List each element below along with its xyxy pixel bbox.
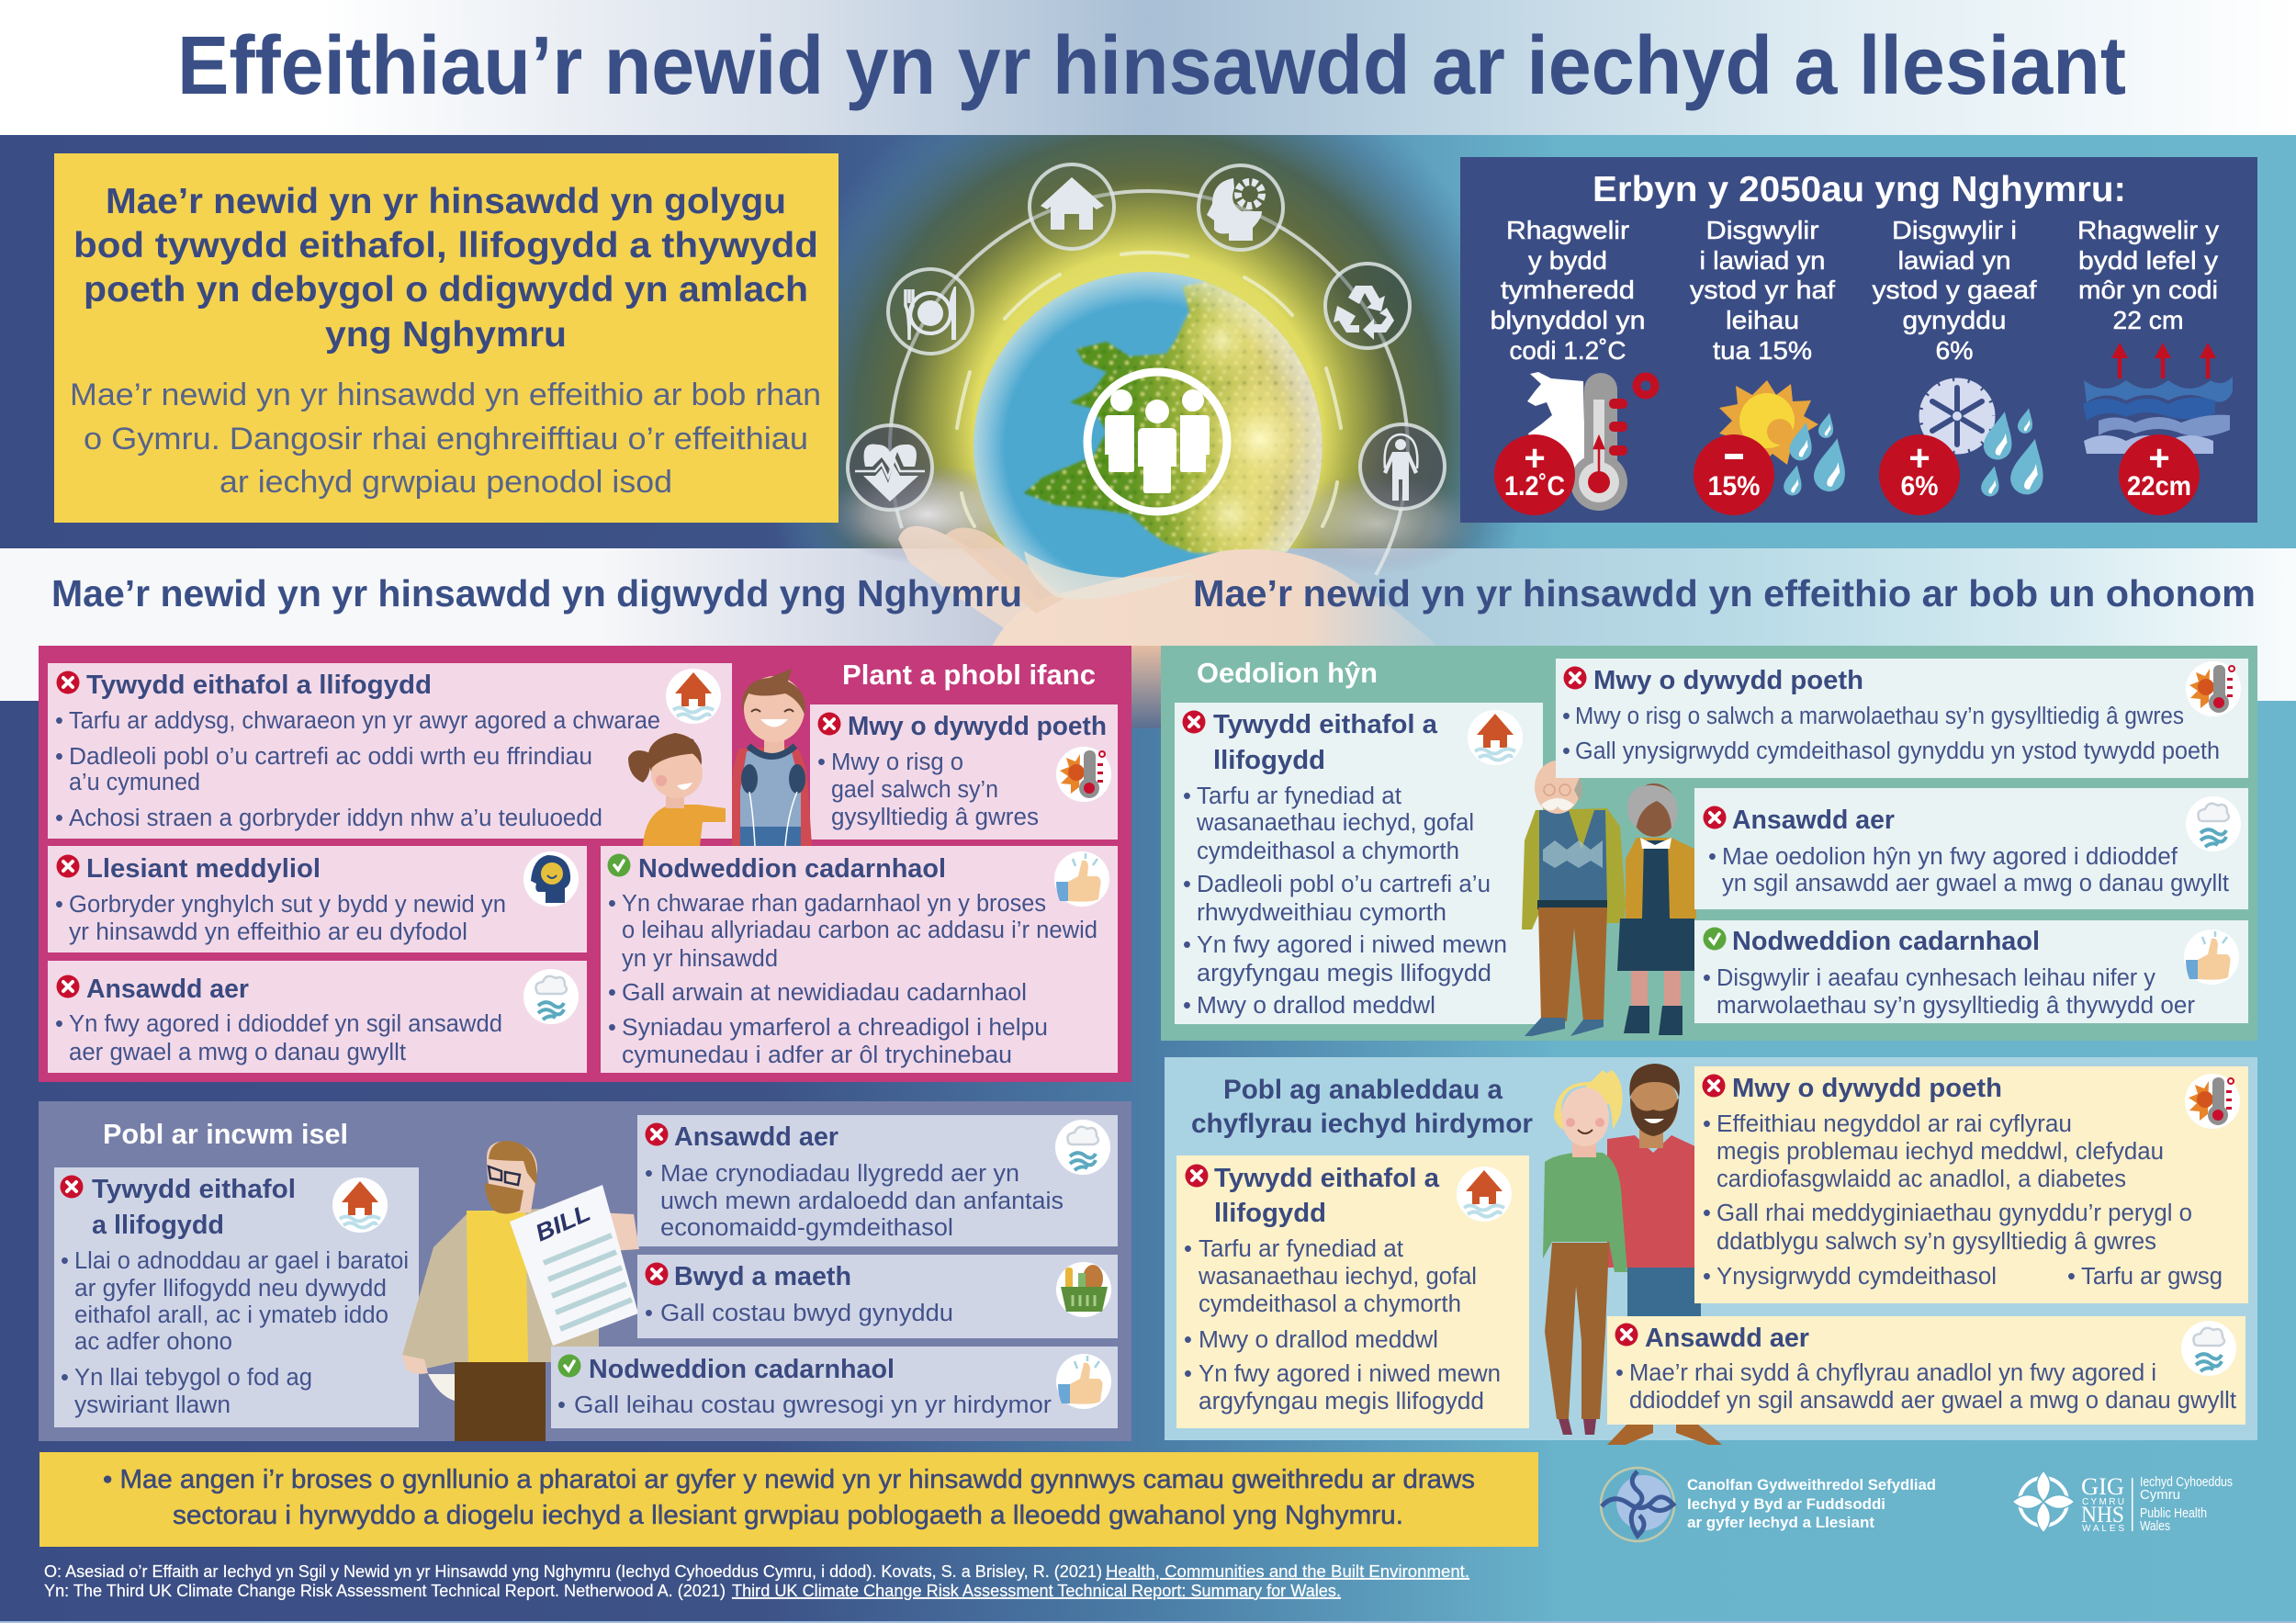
- badge: +1.2°C: +: [1524, 438, 1546, 479]
- bullets: •: [645, 1301, 653, 1326]
- box heading: Nodweddion cadarnhaol: [1732, 927, 2040, 956]
- icon: cloud and wind: [2186, 796, 2241, 851]
- panel: older adults: [1161, 646, 2257, 1041]
- bullets: cymunedau i adfer ar ôl trychinebau: [622, 1043, 1012, 1068]
- badge: [1703, 806, 1727, 828]
- icon: cloud and wind: [523, 969, 579, 1024]
- bullets: •: [1703, 1200, 1711, 1226]
- bullets: •: [55, 892, 63, 918]
- column: temperature text: tymheredd: [1501, 276, 1635, 304]
- title: Effeithiau’r newid yn yr hinsawdd ar iechyd a llesiant: [177, 20, 2126, 112]
- badge: [1183, 711, 1205, 733]
- box: hotter weather: [1694, 1066, 2248, 1303]
- icon: central people ring: [1087, 372, 1227, 512]
- bullets: a’u cymuned: [69, 770, 200, 795]
- badge: [61, 1176, 83, 1198]
- panel: people on low incomes: [39, 1101, 1131, 1441]
- bullets: [817, 750, 1039, 830]
- icon: rising sea level: [2083, 343, 2233, 454]
- icon: flood: [1457, 1167, 1512, 1222]
- bullets: Mwy o risg o: [831, 750, 963, 775]
- badge: [57, 671, 79, 694]
- bullets: yswiriant llawn: [74, 1392, 231, 1418]
- illustration: woman and man: [1543, 1064, 1722, 1445]
- icon: heat: [2186, 661, 2241, 716]
- centre name: ar gyfer Iechyd a Llesiant: [1687, 1514, 1874, 1531]
- badge: -15%: 15%: [1708, 471, 1760, 502]
- bullets: Yn fwy agored i niwed mewn: [1197, 932, 1507, 958]
- column: temperature text: codi 1.2˚C: [1510, 336, 1626, 365]
- box heading: Tywydd eithafol a: [1213, 710, 1438, 739]
- icon: house: [1030, 164, 1114, 249]
- column: summer rainfall text: i lawiad yn: [1699, 246, 1826, 275]
- column: sea level text: bydd lefel y: [2078, 246, 2218, 275]
- icon: food basket: [1056, 1262, 1111, 1317]
- source references: Third UK Climate Change Risk Assessment Technical Report: Summary for Wales.: [732, 1582, 1341, 1600]
- callout: yellow conclusion: [39, 1452, 1538, 1547]
- box: extreme weather and flooding: [48, 663, 732, 839]
- bullets: cymdeithasol a chymorth: [1197, 839, 1459, 864]
- logo: Public Health Wales: [2012, 1471, 2233, 1534]
- illustration: man holding a bill: [402, 1141, 639, 1441]
- box: extreme weather and flooding: [1176, 1155, 1529, 1428]
- icon: heat: [2185, 1074, 2240, 1129]
- column: winter rainfall text: ystod y gaeaf: [1872, 276, 2037, 304]
- badge: [1703, 928, 1727, 950]
- box: air quality: [1694, 788, 2248, 909]
- box heading: Mwy o dywydd poeth: [848, 712, 1107, 741]
- bullets: •: [1708, 844, 1716, 870]
- bullets: Mwy o drallod meddwl: [1199, 1327, 1438, 1353]
- column: winter rainfall text: Disgwylir i: [1892, 216, 2017, 244]
- bullets: •: [61, 1365, 69, 1391]
- panel title: [1191, 1075, 1533, 1139]
- badge: -15%: [1694, 434, 1774, 515]
- bullets: Yn fwy agored i ddioddef yn sgil ansawdd: [69, 1011, 502, 1037]
- bullets: •: [55, 744, 63, 770]
- bullets: •: [1703, 1111, 1711, 1137]
- icon: thumbs up: [1054, 851, 1109, 907]
- badge: +22cm: 22cm: [2127, 471, 2191, 502]
- bullets: •: [608, 891, 616, 917]
- logo: Public Health Wales: Wales: [2140, 1518, 2170, 1534]
- box: air quality: [48, 961, 587, 1073]
- bullets: •: [1703, 965, 1711, 991]
- heading: left section: Mae’r newid yn yr hinsawdd yn digwydd yng Nghymru: [51, 572, 1022, 614]
- box heading: llifogydd: [1214, 1199, 1326, 1228]
- badge: [57, 854, 79, 878]
- icon: heat: [1056, 747, 1111, 802]
- bullets: eithafol arall, ac i ymateb iddo: [74, 1302, 388, 1328]
- bullets: •: [55, 1011, 63, 1037]
- badge: [645, 1122, 669, 1146]
- source references: O: Asesiad o’r Effaith ar Iechyd yn Sgil y Newid yn yr Hinsawdd yng Nghymru (Iechyd Cyhoeddus Cymru, i ddod). Kovats, S. a Brisley, R. (2021): [44, 1562, 1102, 1581]
- bullets: Gall ynysigrwydd cymdeithasol gynyddu yn ystod tywydd poeth: [1575, 738, 2220, 764]
- bullets: [61, 1248, 409, 1418]
- box heading: [1214, 1164, 1440, 1228]
- panel title: Pobl ar incwm isel: [103, 1118, 348, 1150]
- box: hotter weather: [810, 704, 1118, 840]
- bullets: •: [55, 806, 63, 831]
- bullets: [55, 708, 660, 831]
- hand fingers and palm: [898, 526, 1438, 728]
- bullets: yn sgil ansawdd aer gwael a mwg o danau gwyllt: [1722, 871, 2229, 896]
- logo: Public Health Wales: Iechyd Cyhoeddus: [2140, 1474, 2233, 1490]
- box heading: Bwyd a maeth: [674, 1262, 851, 1291]
- central glow: [792, 135, 1510, 548]
- bullets: rhwydweithiau cymorth: [1197, 900, 1446, 926]
- box: hotter weather: [1556, 659, 2248, 778]
- bullets: Mae oedolion hŷn yn fwy agored i ddioddef: [1722, 844, 2178, 870]
- bullets: [1703, 1111, 2223, 1290]
- bullets: yn yr hinsawdd: [622, 946, 778, 972]
- bullets: •: [61, 1248, 69, 1274]
- bullets: Gorbryder ynghylch sut y bydd y newid yn: [69, 892, 506, 918]
- panel: yellow intro: [54, 153, 838, 523]
- box heading: llifogydd: [1213, 746, 1325, 775]
- box: air quality: [1607, 1316, 2245, 1425]
- badge: +6%: [1879, 434, 1960, 515]
- box heading: Ansawdd aer: [86, 975, 249, 1004]
- box: positive features: [601, 846, 1118, 1073]
- bullets: [645, 1161, 1064, 1241]
- bullets: •: [608, 980, 616, 1006]
- box: food and nutrition: [637, 1255, 1118, 1338]
- bullets: Tarfu ar fynediad at: [1197, 783, 1401, 809]
- badge: +1.2°C: 1.2˚C: [1504, 471, 1565, 502]
- bullets: megis problemau iechyd meddwl, clefydau: [1716, 1139, 2164, 1165]
- bullets: Dadleoli pobl o’u cartrefi ac oddi wrth eu ffrindiau: [69, 744, 592, 770]
- box heading: Tywydd eithafol a llifogydd: [86, 671, 432, 700]
- column: summer rainfall text: tua 15%: [1713, 336, 1812, 365]
- centre name: [1687, 1476, 1936, 1531]
- callout text: [103, 1465, 1475, 1530]
- bullets: argyfyngau megis llifogydd: [1197, 961, 1491, 986]
- icon: sun and rain: [1719, 380, 1852, 497]
- badge: +1.2°C: [1494, 434, 1575, 515]
- icon: snowflake and rain: [1922, 381, 2051, 498]
- source references: [44, 1562, 1469, 1600]
- centre name: Iechyd y Byd ar Fuddsoddi: [1687, 1495, 1885, 1513]
- bullets: Mwy o risg o salwch a marwolaethau sy’n gysylltiedig â gwres: [1575, 704, 2184, 729]
- box heading: Ansawdd aer: [1645, 1324, 1809, 1353]
- badge: [1615, 1323, 1638, 1347]
- bullets: •: [1183, 872, 1191, 897]
- bullets: [1183, 783, 1507, 1019]
- title band: [0, 0, 2296, 135]
- bullets: •: [1562, 704, 1570, 729]
- panel title: chyflyrau iechyd hirdymor: [1191, 1109, 1533, 1139]
- badge: +22cm: [2119, 434, 2200, 515]
- bullets: uwch mewn ardaloedd dan anfantais: [660, 1189, 1064, 1214]
- bullets: argyfyngau megis llifogydd: [1199, 1389, 1484, 1414]
- column: winter rainfall text: [1872, 216, 2037, 365]
- badge: [645, 1262, 669, 1286]
- bullets: Yn llai tebygol o fod ag: [74, 1365, 312, 1391]
- logo: Public Health Wales: WALES: [2082, 1524, 2124, 1534]
- icon: thumbs up: [1056, 1354, 1111, 1409]
- logo: Public Health Wales: Cymru: [2140, 1487, 2180, 1503]
- column: sea level text: 22 cm: [2112, 306, 2184, 334]
- bullets: •: [817, 750, 826, 775]
- centre name: Canolfan Gydweithredol Sefydliad: [1687, 1476, 1936, 1493]
- box heading: Mwy o dywydd poeth: [1732, 1074, 2002, 1103]
- bullets: •: [557, 1392, 566, 1418]
- bullets: economaidd-gymdeithasol: [660, 1215, 953, 1241]
- bullets: •: [1183, 993, 1191, 1019]
- intro body text: ar iechyd grwpiau penodol isod: [219, 465, 672, 500]
- box: mental wellbeing: [48, 846, 587, 952]
- bullets: [608, 891, 1097, 1068]
- column: temperature text: Rhagwelir: [1506, 216, 1629, 244]
- box heading: [1213, 710, 1438, 775]
- bullets: Gall rhai meddyginiaethau gynyddu’r perygl o: [1716, 1200, 2192, 1226]
- logo: WHO Collaborating Centre: [1601, 1468, 1936, 1541]
- badge: [1703, 1075, 1725, 1097]
- bullets: Disgwylir i aeafau cynhesach leihau nifer y: [1716, 965, 2155, 991]
- box heading: Mwy o dywydd poeth: [1593, 666, 1863, 695]
- bullets: Dadleoli pobl o’u cartrefi a’u: [1197, 872, 1491, 897]
- box heading: Nodweddion cadarnhaol: [638, 854, 946, 884]
- bullets: ddatblygu salwch sy’n gysylltiedig â gwres: [1716, 1229, 2156, 1255]
- bullets: cymdeithasol a chymorth: [1199, 1291, 1461, 1317]
- bullets: Yn fwy agored i niwed mewn: [1199, 1361, 1501, 1387]
- box heading: Tywydd eithafol a: [1214, 1164, 1440, 1193]
- intro heading: poeth yn debygol o ddigwydd yn amlach: [84, 270, 808, 310]
- bullets: Tarfu ar fynediad at: [1199, 1236, 1403, 1262]
- bullets: [1184, 1236, 1501, 1414]
- badge: [1185, 1165, 1209, 1187]
- bullets: •: [645, 1161, 653, 1187]
- intro body text: o Gymru. Dangosir rhai enghreifftiau o’r effeithiau: [84, 422, 808, 456]
- icon: thumbs up: [2184, 930, 2239, 985]
- icon: flood: [1468, 710, 1523, 765]
- bullets: Mae’r rhai sydd â chyflyrau anadlol yn fwy agored i: [1629, 1360, 2156, 1386]
- icon ring arc: [890, 191, 1408, 575]
- bullets: [55, 892, 506, 945]
- bullets: o leihau allyriadau carbon ac addasu i’r newid: [622, 918, 1097, 943]
- icon: Wales and thermometer: [1527, 372, 1655, 511]
- bullets: cardiofasgwlaidd ac anadlol, a diabetes: [1716, 1167, 2126, 1192]
- icon: recycle: [1325, 264, 1410, 348]
- box: positive features: [551, 1347, 1118, 1428]
- globe sphere: [974, 272, 1322, 591]
- bullets: •: [1615, 1360, 1624, 1386]
- icon: head: [523, 851, 579, 907]
- badge: [608, 854, 630, 876]
- bullets: •: [55, 708, 63, 734]
- bullets: gael salwch sy’n: [831, 777, 998, 803]
- column: summer rainfall text: [1690, 216, 1835, 365]
- panel: children and young people: [39, 646, 1131, 1082]
- bullets: Syniadau ymarferol a chreadigol i helpu: [622, 1015, 1048, 1041]
- logo: Public Health Wales: NHS: [2081, 1503, 2124, 1527]
- bullets: [1562, 704, 2220, 764]
- bullets: Ynysigrwydd cymdeithasol: [1716, 1264, 1997, 1290]
- box heading: Tywydd eithafol: [92, 1175, 296, 1204]
- bill: [510, 1185, 638, 1346]
- heading: right section: Mae’r newid yn yr hinsawdd yn effeithio ar bob un ohonom: [1193, 572, 2256, 614]
- icon: cloud and wind: [2181, 1321, 2236, 1376]
- bullets: •: [1703, 1264, 1711, 1290]
- bullets: Gall arwain at newidiadau cadarnhaol: [622, 980, 1027, 1006]
- bullets: [1615, 1360, 2236, 1414]
- bullets: •: [1184, 1236, 1192, 1262]
- bullets: Tarfu ar gwsg: [2081, 1264, 2223, 1290]
- illustration: older couple: [1522, 761, 1696, 1036]
- bullets: marwolaethau sy’n gysylltiedig â thywydd oer: [1716, 993, 2196, 1019]
- bullets: Yn chwarae rhan gadarnhaol yn y broses: [622, 891, 1046, 917]
- bill: BILL: [531, 1199, 594, 1246]
- source references: Yn: The Third UK Climate Change Risk Assessment Technical Report. Netherwood A. (2021): [44, 1582, 726, 1600]
- panel title: Plant a phobl ifanc: [842, 659, 1096, 691]
- bullets: •: [1183, 783, 1191, 809]
- badge: [57, 975, 79, 997]
- box heading: Nodweddion cadarnhaol: [589, 1355, 895, 1384]
- bullets: Gall costau bwyd gynyddu: [660, 1301, 953, 1326]
- column: temperature text: [1490, 216, 1646, 365]
- intro heading: bod tywydd eithafol, llifogydd a thywydd: [73, 226, 818, 265]
- icon: cloud and wind: [1055, 1120, 1110, 1175]
- column: winter rainfall text: lawiad yn: [1897, 246, 2011, 275]
- bullets: Mae crynodiadau llygredd aer yn: [660, 1161, 1019, 1187]
- panel: disabled people and long-term conditions: [1165, 1057, 2257, 1445]
- bullets: •: [608, 1015, 616, 1041]
- box: extreme weather and flooding: [1175, 703, 1543, 1024]
- column: sea level text: môr yn codi: [2078, 276, 2218, 304]
- haze under the icon ring: [827, 464, 1479, 574]
- callout text: • Mae angen i’r broses o gynllunio a pharatoi ar gyfer y newid yn yr hinsawdd gynnwys camau gweithredu ar draws: [103, 1465, 1475, 1494]
- icon: flood: [666, 669, 721, 724]
- projections heading: Erbyn y 2050au yng Nghymru:: [1593, 170, 2126, 209]
- intro heading: yng Nghymru: [325, 315, 567, 355]
- column: temperature text: blynyddol yn: [1490, 306, 1646, 334]
- inner dashes: [957, 253, 1341, 526]
- column: summer rainfall text: ystod yr haf: [1690, 276, 1835, 304]
- box heading: Ansawdd aer: [1732, 806, 1895, 835]
- icon: head with gear: [1199, 165, 1283, 250]
- bullets: Achosi straen a gorbryder iddyn nhw a’u teuluoedd: [69, 806, 602, 831]
- bullets: Llai o adnoddau ar gael i baratoi: [74, 1248, 409, 1274]
- badge: +6%: 6%: [1901, 471, 1938, 502]
- bullets: Mwy o drallod meddwl: [1197, 993, 1435, 1019]
- bullets: ac adfer ohono: [74, 1329, 232, 1355]
- bullets: ar gyfer llifogydd neu dywydd: [74, 1276, 387, 1302]
- column: sea level text: [2077, 216, 2219, 334]
- column: sea level text: Rhagwelir y: [2077, 216, 2219, 244]
- badge: [817, 713, 841, 735]
- badge: +22cm: +: [2148, 438, 2170, 479]
- column: winter rainfall text: 6%: [1936, 336, 1973, 365]
- bullets: •: [1184, 1361, 1192, 1387]
- panel: 2050s projections: [1460, 157, 2257, 523]
- bullets: •: [1562, 738, 1570, 764]
- box heading: Llesiant meddyliol: [86, 854, 321, 884]
- column: temperature text: y bydd: [1528, 246, 1607, 275]
- panel title: Oedolion hŷn: [1197, 657, 1378, 689]
- bullets: [1703, 965, 2196, 1019]
- intro heading: [73, 182, 818, 355]
- callout text: sectorau i hyrwyddo a diogelu iechyd a llesiant grwpiau poblogaeth a lleoedd gwahanol yng Nghymru.: [173, 1501, 1403, 1530]
- section heading band: [0, 548, 2296, 701]
- badge: +6%: +: [1908, 438, 1930, 479]
- box heading: [92, 1175, 296, 1240]
- logo: Public Health Wales: Public Health: [2140, 1505, 2207, 1521]
- panel title: Pobl ag anableddau a: [1223, 1075, 1503, 1105]
- bullets: gysylltiedig â gwres: [831, 805, 1039, 830]
- badge: [558, 1354, 580, 1378]
- source references: Health, Communities and the Built Environment.: [1106, 1562, 1469, 1581]
- bullets: •: [2067, 1264, 2076, 1290]
- column: summer rainfall text: Disgwylir: [1706, 216, 1818, 244]
- bullets: aer gwael a mwg o danau gwyllt: [69, 1040, 406, 1065]
- bullets: yr hinsawdd yn effeithio ar eu dyfodol: [69, 919, 467, 945]
- bullets: wasanaethau iechyd, gofal: [1198, 1264, 1477, 1290]
- badge: [1563, 667, 1587, 689]
- column: summer rainfall text: leihau: [1726, 306, 1799, 334]
- box heading: a llifogydd: [92, 1211, 224, 1240]
- box: extreme weather and flooding: [54, 1167, 419, 1427]
- intro body text: [70, 378, 821, 500]
- icon: heart with pulse: [848, 425, 932, 510]
- box: positive features: [1694, 920, 2248, 1023]
- bullets: Tarfu ar addysg, chwaraeon yn yr awyr agored a chwarae: [69, 708, 660, 734]
- logo: Public Health Wales: GIG: [2081, 1473, 2124, 1500]
- bullets: Gall leihau costau gwresogi yn yr hirdymor: [574, 1392, 1052, 1418]
- icon: person with skipping rope: [1360, 424, 1445, 509]
- bullets: •: [1184, 1327, 1192, 1353]
- box: air quality: [637, 1115, 1118, 1246]
- bullets: ddioddef yn sgil ansawdd aer gwael a mwg o danau gwyllt: [1629, 1388, 2236, 1414]
- bullets: Effeithiau negyddol ar rai cyflyrau: [1716, 1111, 2072, 1137]
- box heading: Ansawdd aer: [674, 1122, 838, 1152]
- intro body text: Mae’r newid yn yr hinsawdd yn effeithio ar bob rhan: [70, 378, 821, 412]
- intro heading: Mae’r newid yn yr hinsawdd yn golygu: [106, 182, 786, 221]
- bullets: wasanaethau iechyd, gofal: [1196, 810, 1474, 836]
- illustration: boy and girl: [628, 669, 812, 846]
- icon: flood: [332, 1178, 388, 1233]
- bullets: [1708, 844, 2229, 896]
- logo: Public Health Wales: CYMRU: [2082, 1497, 2124, 1507]
- bullets: [55, 1011, 502, 1065]
- column: winter rainfall text: gynyddu: [1903, 306, 2006, 334]
- bullets: •: [1183, 932, 1191, 958]
- icon: plate and cutlery: [888, 269, 973, 354]
- image: globe with Wales held in a hand: [848, 164, 1445, 728]
